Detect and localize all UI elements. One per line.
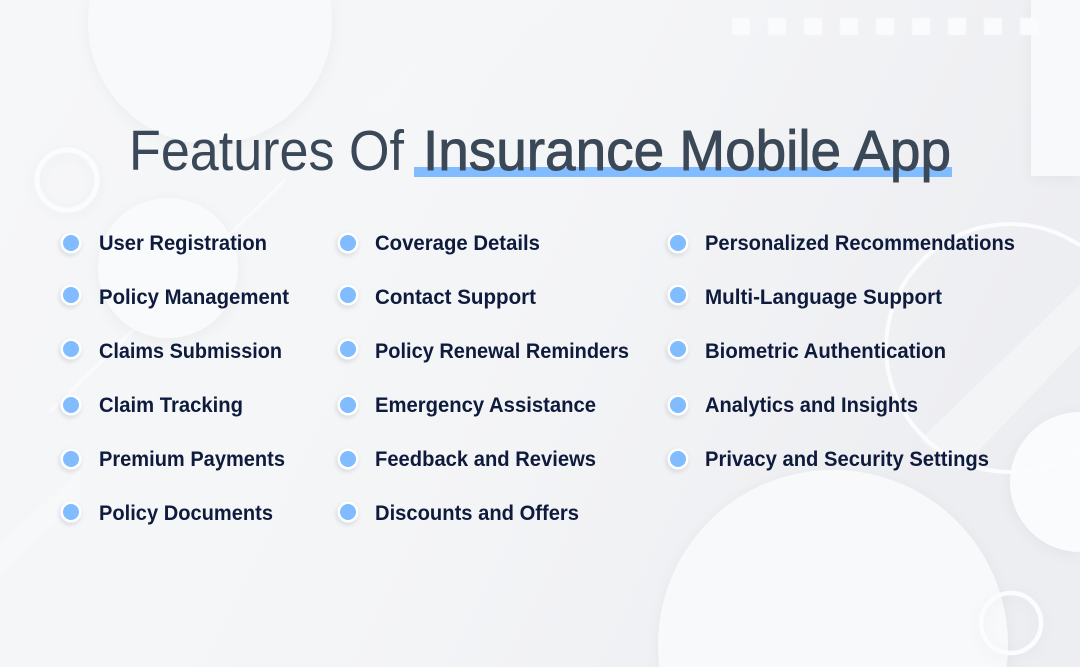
item: Feedback and Reviews: Feedback and Reviews	[375, 448, 596, 471]
feature list column 1	[60, 232, 289, 525]
title	[129, 119, 952, 183]
item: User Registration: User Registration	[99, 232, 267, 255]
item: Policy Management: Policy Management	[99, 286, 289, 309]
title underline	[414, 167, 952, 177]
item: Coverage Details: Coverage Details	[375, 232, 540, 255]
item: Multi-Language Support: Multi-Language Support	[705, 286, 942, 309]
item: Contact Support: Contact Support	[375, 286, 536, 309]
decorative square row	[732, 18, 1038, 35]
item: Biometric Authentication: Biometric Authentication	[705, 340, 946, 363]
item: Claims Submission: Claims Submission	[99, 340, 282, 363]
item: Analytics and Insights: Analytics and Insights	[705, 394, 918, 417]
item: Policy Documents: Policy Documents	[99, 502, 273, 525]
title text: Features Of	[129, 119, 404, 183]
item: Personalized Recommendations: Personalized Recommendations	[705, 232, 1015, 255]
item: Policy Renewal Reminders: Policy Renewal Reminders	[375, 340, 629, 363]
item: Emergency Assistance: Emergency Assistance	[375, 394, 596, 417]
feature list column 2	[338, 232, 629, 525]
title highlighted text: Insurance Mobile App	[423, 119, 951, 183]
item: Privacy and Security Settings: Privacy and Security Settings	[705, 448, 989, 471]
item: Premium Payments: Premium Payments	[99, 448, 285, 471]
item: Claim Tracking: Claim Tracking	[99, 394, 243, 417]
item: Discounts and Offers: Discounts and Offers	[375, 502, 579, 525]
feature list column 3	[668, 232, 1015, 471]
